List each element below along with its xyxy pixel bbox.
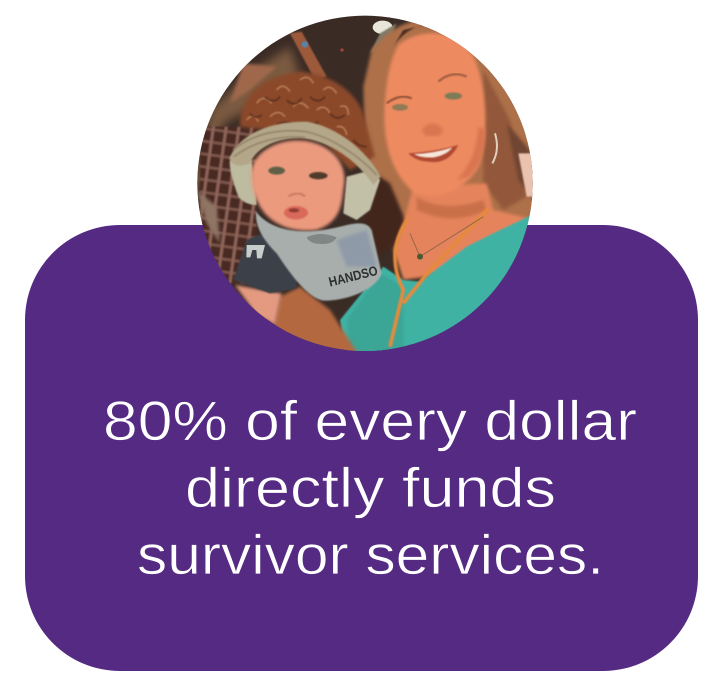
baby: ear muffs: [229, 122, 381, 220]
baby: face: [251, 140, 345, 231]
mother: hair: [363, 17, 543, 257]
photo background: [190, 10, 540, 360]
baby: bib: [256, 212, 382, 301]
purple panel: [25, 225, 698, 671]
mother: turquoise top: [340, 215, 532, 360]
line 2: directly funds: [185, 456, 556, 519]
baby: curly hair: [240, 72, 375, 170]
baby: bib: HANDSO: [327, 263, 379, 290]
line 1: 80% of every dollar: [103, 389, 637, 452]
lanyard: [390, 208, 488, 347]
necklace: [410, 217, 483, 257]
line 3: survivor services.: [137, 523, 604, 586]
mother: neck and chest: [393, 183, 530, 280]
headline text: [103, 389, 637, 586]
baby: shirt: [233, 230, 297, 293]
baby: arm and hand holding: [272, 285, 359, 351]
photo: mother and baby in a circle: [190, 10, 543, 360]
mother: face: [384, 33, 497, 195]
